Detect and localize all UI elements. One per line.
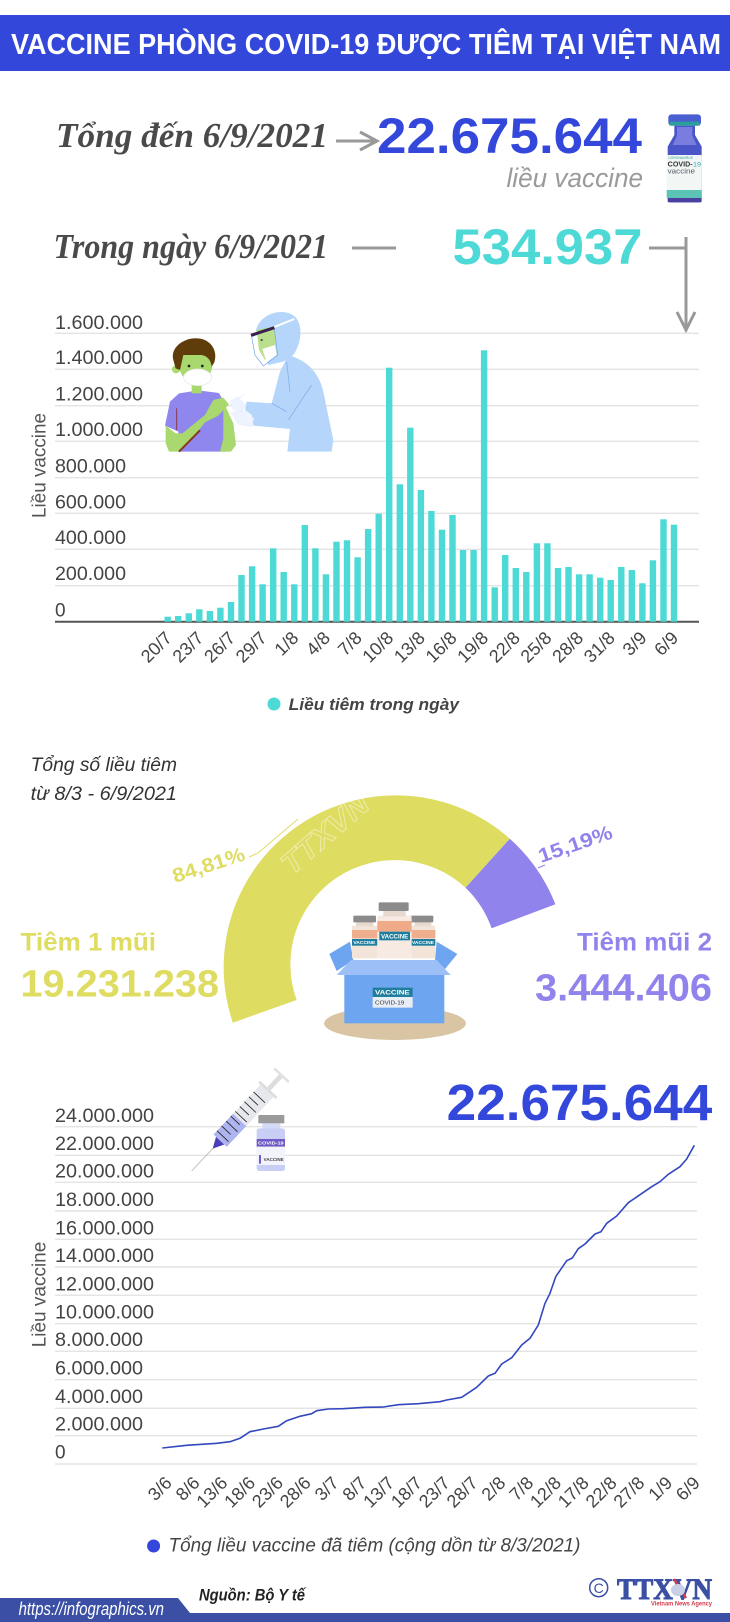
vial: [257, 1115, 285, 1171]
x axis date labels: 23/7: [169, 628, 207, 667]
x axis date labels: 20/7: [137, 628, 176, 667]
y axis labels: [55, 1106, 154, 1463]
x axis date labels: 6/9: [672, 1473, 704, 1505]
syringe: [183, 1066, 291, 1179]
icon: child being vaccinated by nurse: [165, 312, 333, 452]
legend: daily doses: Liều tiêm trong ngày: [289, 695, 461, 714]
cumulative line: [162, 1145, 694, 1448]
y axis labels: 800.000: [55, 457, 126, 478]
x axis date labels: 18/7: [387, 1473, 426, 1512]
x axis date labels: 17/8: [554, 1473, 593, 1512]
arrow: daily number to last bar: [649, 237, 695, 330]
y axis title: Liều vaccine: [30, 413, 51, 518]
logo: TTXVN: TTXVN: [617, 1573, 712, 1606]
x axis date labels: [144, 1473, 704, 1512]
y axis labels: 1.000.000: [55, 420, 143, 441]
x axis date labels: 27/8: [610, 1473, 648, 1512]
y axis labels: 200.000: [55, 564, 126, 585]
y axis title: Liều vaccine: [30, 1242, 51, 1347]
semi-donut chart: first and second doses: [170, 787, 616, 1023]
logo: TTXVN: [590, 1573, 712, 1608]
x axis date labels: 16/8: [422, 628, 461, 667]
x axis date labels: 8/6: [172, 1473, 204, 1505]
x axis date labels: 28/8: [548, 628, 587, 667]
first dose label: 19.231.238: [20, 964, 219, 1006]
centre vial: VACCINE: [381, 934, 408, 940]
y axis labels: [55, 313, 143, 622]
x axis date labels: 10/8: [358, 628, 397, 667]
y axis labels: 400.000: [55, 528, 126, 549]
y axis labels: 8.000.000: [55, 1330, 143, 1351]
y axis labels: 18.000.000: [55, 1190, 154, 1211]
title banner: [0, 15, 730, 71]
x axis date labels: 19/8: [453, 628, 492, 667]
heading: total doses period: Tổng số liều tiêm: [31, 755, 177, 776]
daily label: Trong ngày 6/9/2021: [54, 227, 328, 266]
y axis labels: 20.000.000: [55, 1162, 154, 1183]
gridlines and axis: [55, 333, 699, 622]
x axis date labels: 1/9: [644, 1473, 676, 1505]
x axis date labels: 2/8: [478, 1473, 509, 1505]
x axis date labels: 1/8: [271, 628, 302, 660]
x axis date labels: 12/8: [526, 1473, 565, 1512]
x axis date labels: 22/8: [485, 628, 524, 667]
left vial: VACCINE: [353, 940, 375, 945]
x axis date labels: 31/8: [580, 628, 619, 667]
right vial: VACCINE: [412, 940, 434, 945]
y axis labels: 1.400.000: [55, 348, 143, 369]
cumulative total number: 22.675.644: [447, 1074, 713, 1131]
x axis date labels: 29/7: [232, 628, 271, 667]
footer bar with website: https://infographics.vn: [19, 1599, 164, 1619]
heading: total doses period: [31, 755, 177, 805]
total doses number: 22.675.644: [377, 108, 642, 164]
x axis date labels: 4/8: [302, 628, 334, 660]
y axis labels: 1.200.000: [55, 385, 143, 406]
heading: total doses period: từ 8/3 - 6/9/2021: [31, 784, 177, 805]
bar chart: daily doses: [30, 313, 699, 667]
y axis labels: 12.000.000: [55, 1274, 154, 1295]
total to date label: Tổng đến 6/9/2021: [56, 116, 328, 155]
x axis date labels: 28/6: [276, 1473, 315, 1512]
x axis date labels: 22/8: [582, 1473, 621, 1512]
icon: vaccine vial: 19: [693, 162, 701, 169]
x axis date labels: 13/8: [390, 628, 429, 667]
x axis date labels: 23/6: [248, 1473, 287, 1512]
second dose label: 3.444.406: [535, 968, 712, 1010]
box label: [373, 988, 413, 1008]
leader line: first dose: [249, 819, 298, 857]
y axis labels: 22.000.000: [55, 1134, 154, 1155]
icon: vaccine vial: [667, 114, 702, 202]
connector dash: [352, 246, 396, 250]
x axis date labels: 13/7: [359, 1473, 398, 1512]
box label: VACCINE: [375, 990, 410, 997]
x axis date labels: 8/7: [339, 1473, 370, 1505]
second dose percent: 15,19%: [535, 822, 616, 868]
y axis labels: 6.000.000: [55, 1358, 143, 1379]
y axis labels: 0: [55, 1442, 66, 1463]
arc: second dose share: [466, 839, 555, 928]
icon: vaccine box with vials: [324, 902, 466, 1040]
y axis labels: 2.000.000: [55, 1415, 143, 1436]
daily doses number: 534.937: [452, 219, 642, 275]
y axis labels: 14.000.000: [55, 1246, 154, 1267]
leader line: second dose: [538, 865, 545, 868]
footer bar with website: [0, 1598, 730, 1622]
source: Nguồn: Bộ Y tế: [199, 1586, 306, 1605]
child: [165, 338, 236, 452]
y axis labels: 4.000.000: [55, 1387, 143, 1408]
first dose percent: 84,81%: [170, 844, 248, 888]
x axis date labels: 7/8: [334, 628, 366, 660]
y axis labels: 24.000.000: [55, 1106, 154, 1127]
left vial: [352, 916, 377, 958]
second dose label: [535, 929, 712, 1010]
icon: syringe and vial: [183, 1066, 291, 1179]
logo: TTXVN: Vietnam News Agency: [651, 1600, 712, 1608]
bars: [164, 350, 677, 622]
legend: cumulative doses: Tổng liều vaccine đã tiêm (cộng dồn từ 8/3/2021): [168, 1536, 580, 1557]
gridlines: [55, 1127, 697, 1464]
arrow: total to number: [336, 132, 377, 150]
x axis date labels: 25/8: [517, 628, 556, 667]
x axis date labels: 3/6: [144, 1473, 176, 1505]
watermark: TTXVN: [275, 787, 377, 881]
x axis date labels: 6/9: [650, 628, 682, 660]
icon: vaccine vial: vaccine: [668, 167, 695, 176]
first dose label: Tiêm 1 mũi: [20, 929, 156, 957]
x axis date labels: 28/7: [443, 1473, 482, 1512]
x axis date labels: 13/6: [193, 1473, 231, 1512]
y axis labels: 10.000.000: [55, 1303, 154, 1324]
first dose label: [20, 929, 219, 1006]
y axis labels: 16.000.000: [55, 1218, 154, 1239]
x axis date labels: [137, 628, 682, 667]
x axis date labels: 3/9: [619, 628, 651, 660]
arc: first dose share: [224, 795, 510, 1023]
x axis date labels: 26/7: [200, 628, 239, 667]
x axis date labels: 3/7: [311, 1473, 343, 1505]
icon: vaccine vial: COVID-: [668, 160, 693, 169]
right vial: [411, 916, 435, 958]
line chart: cumulative doses: [30, 1106, 704, 1512]
x axis date labels: 23/7: [415, 1473, 454, 1512]
box label: COVID-19: [375, 1001, 404, 1007]
x axis date labels: 18/6: [220, 1473, 259, 1512]
centre vial: [377, 902, 412, 958]
second dose label: Tiêm mũi 2: [577, 929, 712, 957]
vial: VACCINE: [264, 1157, 284, 1162]
y axis labels: 0: [55, 601, 66, 622]
logo: TTXVN: C: [594, 1580, 604, 1596]
nurse: [230, 312, 333, 452]
y axis labels: 600.000: [55, 493, 126, 514]
icon: vaccine vial: CORONAVIRUS: [668, 156, 694, 160]
vial: COVID-19: [258, 1141, 284, 1147]
y axis labels: 1.600.000: [55, 313, 143, 334]
x axis date labels: 7/8: [505, 1473, 537, 1505]
unit: vaccine doses: liều vaccine: [506, 163, 643, 193]
